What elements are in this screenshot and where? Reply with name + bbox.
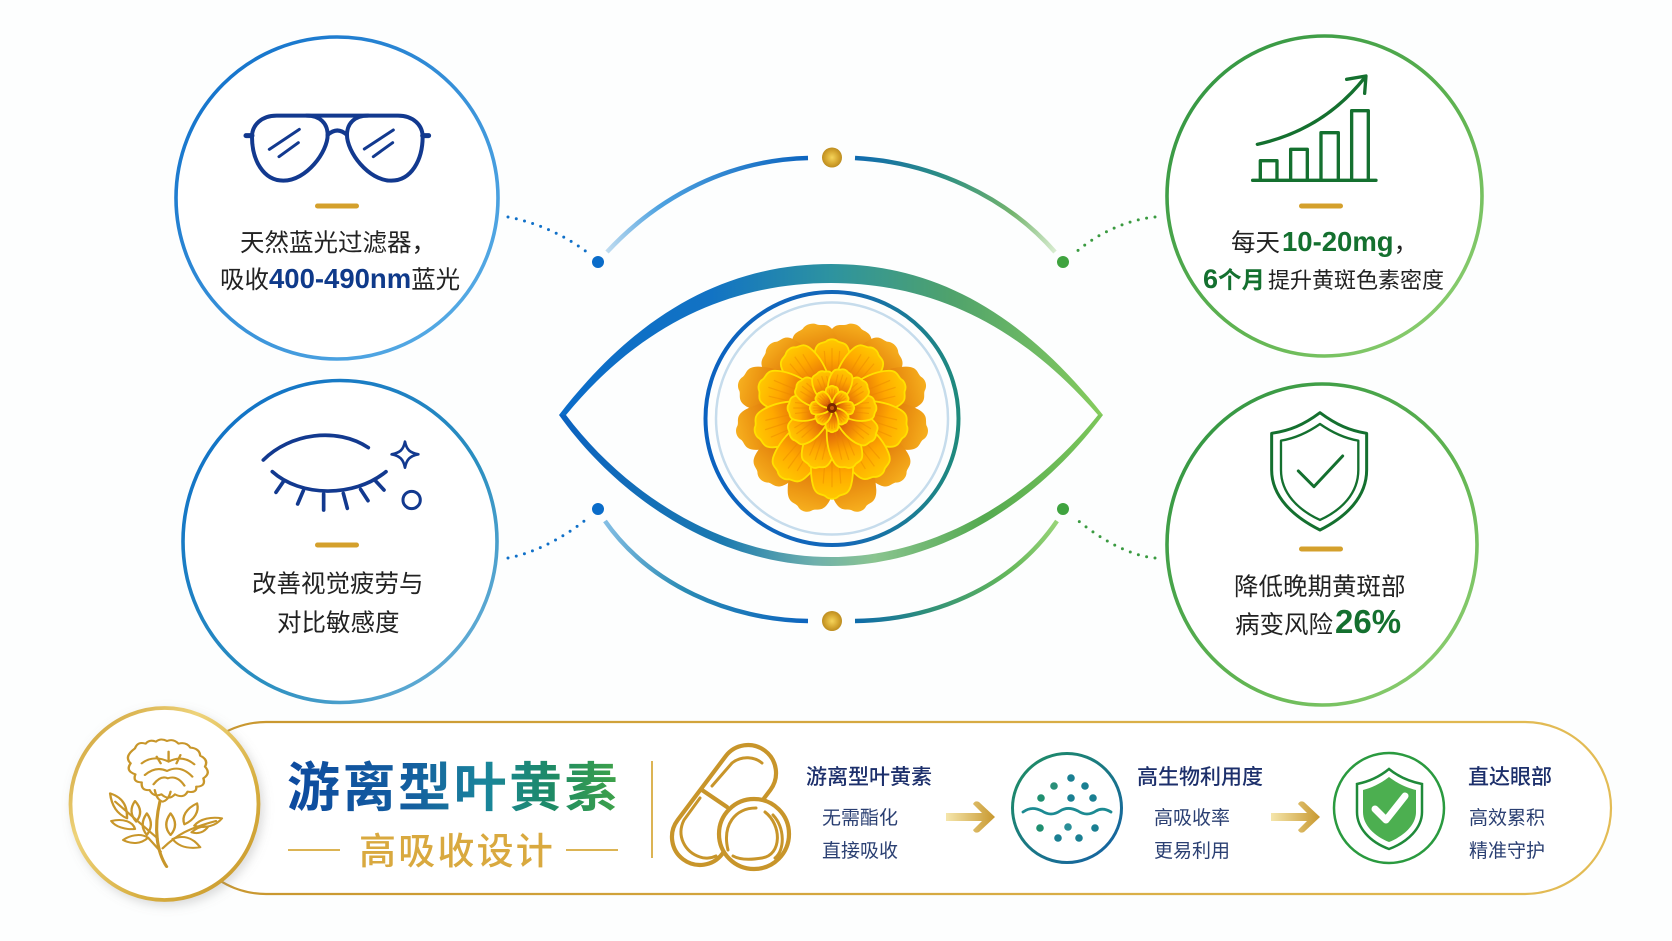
panel: visual fatigue: [183, 380, 497, 702]
title: 游离型叶黄素: [287, 759, 620, 818]
connector: dotted lines: [508, 217, 1155, 558]
step 2 text: 更易利用: [1154, 840, 1230, 862]
icon: closed eye with sparkle: [263, 435, 420, 510]
panel: daily dose: [1167, 36, 1482, 356]
panel: blue light filter: [176, 37, 498, 359]
icon: rising bar chart: [1253, 76, 1376, 180]
text: visual fatigue: 改善视觉疲劳与: [252, 570, 424, 598]
text: daily dose: 6个月提升黄斑色素密度: [1203, 264, 1444, 294]
subtitle with rules: 高吸收设计: [359, 831, 555, 872]
band outline: [180, 722, 1611, 894]
step 3 text: 精准守护: [1469, 840, 1545, 862]
divider: [315, 204, 359, 208]
panel: AMD risk: [1167, 384, 1477, 705]
step 2 text: 高生物利用度: [1137, 766, 1263, 789]
text: daily dose: 每天10-20mg，: [1231, 226, 1418, 257]
text: AMD risk: 病变风险26%: [1235, 603, 1401, 640]
step 2 text: 高吸收率: [1154, 807, 1230, 829]
text: AMD risk: 降低晚期黄斑部: [1234, 573, 1406, 601]
step 3 text: 高效累积: [1469, 807, 1545, 829]
icon: shield with check: [1272, 413, 1367, 530]
text: blue light: [220, 229, 460, 294]
step 3 text: [1468, 766, 1552, 862]
divider: [315, 542, 359, 548]
icon: green shield badge: [1334, 753, 1444, 863]
text: blue light: 天然蓝光过滤器，: [240, 229, 436, 257]
text: daily dose: [1203, 226, 1444, 294]
step 1 text: 无需酯化: [822, 807, 898, 829]
text: visual fatigue: [252, 570, 424, 637]
step 1 text: [806, 766, 932, 862]
icon: line marigold: [110, 739, 222, 867]
divider: [1299, 546, 1343, 552]
connector: nodes: [592, 256, 1069, 515]
text: blue light: 吸收400-490nm蓝光: [220, 263, 460, 294]
gold dots: [822, 148, 842, 631]
badge: gold line marigold: [70, 708, 258, 900]
eye outline: [559, 264, 1103, 566]
step 3 text: 直达眼部: [1468, 766, 1552, 789]
icon: marigold flower: [730, 318, 934, 518]
icon: glasses: [246, 116, 429, 181]
step 2 text: [1137, 766, 1263, 862]
arrow: [1271, 801, 1320, 833]
divider: [1299, 204, 1343, 208]
text: visual fatigue: 对比敏感度: [277, 609, 400, 637]
eyebrow arcs: [605, 158, 1057, 621]
step 1 text: 游离型叶黄素: [806, 766, 932, 789]
arrow: [946, 801, 995, 833]
step 1 text: 直接吸收: [822, 840, 898, 862]
panel: bottom band: [70, 708, 1611, 900]
icon: bioavailability circle: [1012, 754, 1122, 862]
vertical divider: [651, 761, 653, 858]
icon: capsule: [661, 734, 789, 876]
text: AMD risk: [1234, 573, 1406, 640]
iris rings: [706, 292, 958, 545]
